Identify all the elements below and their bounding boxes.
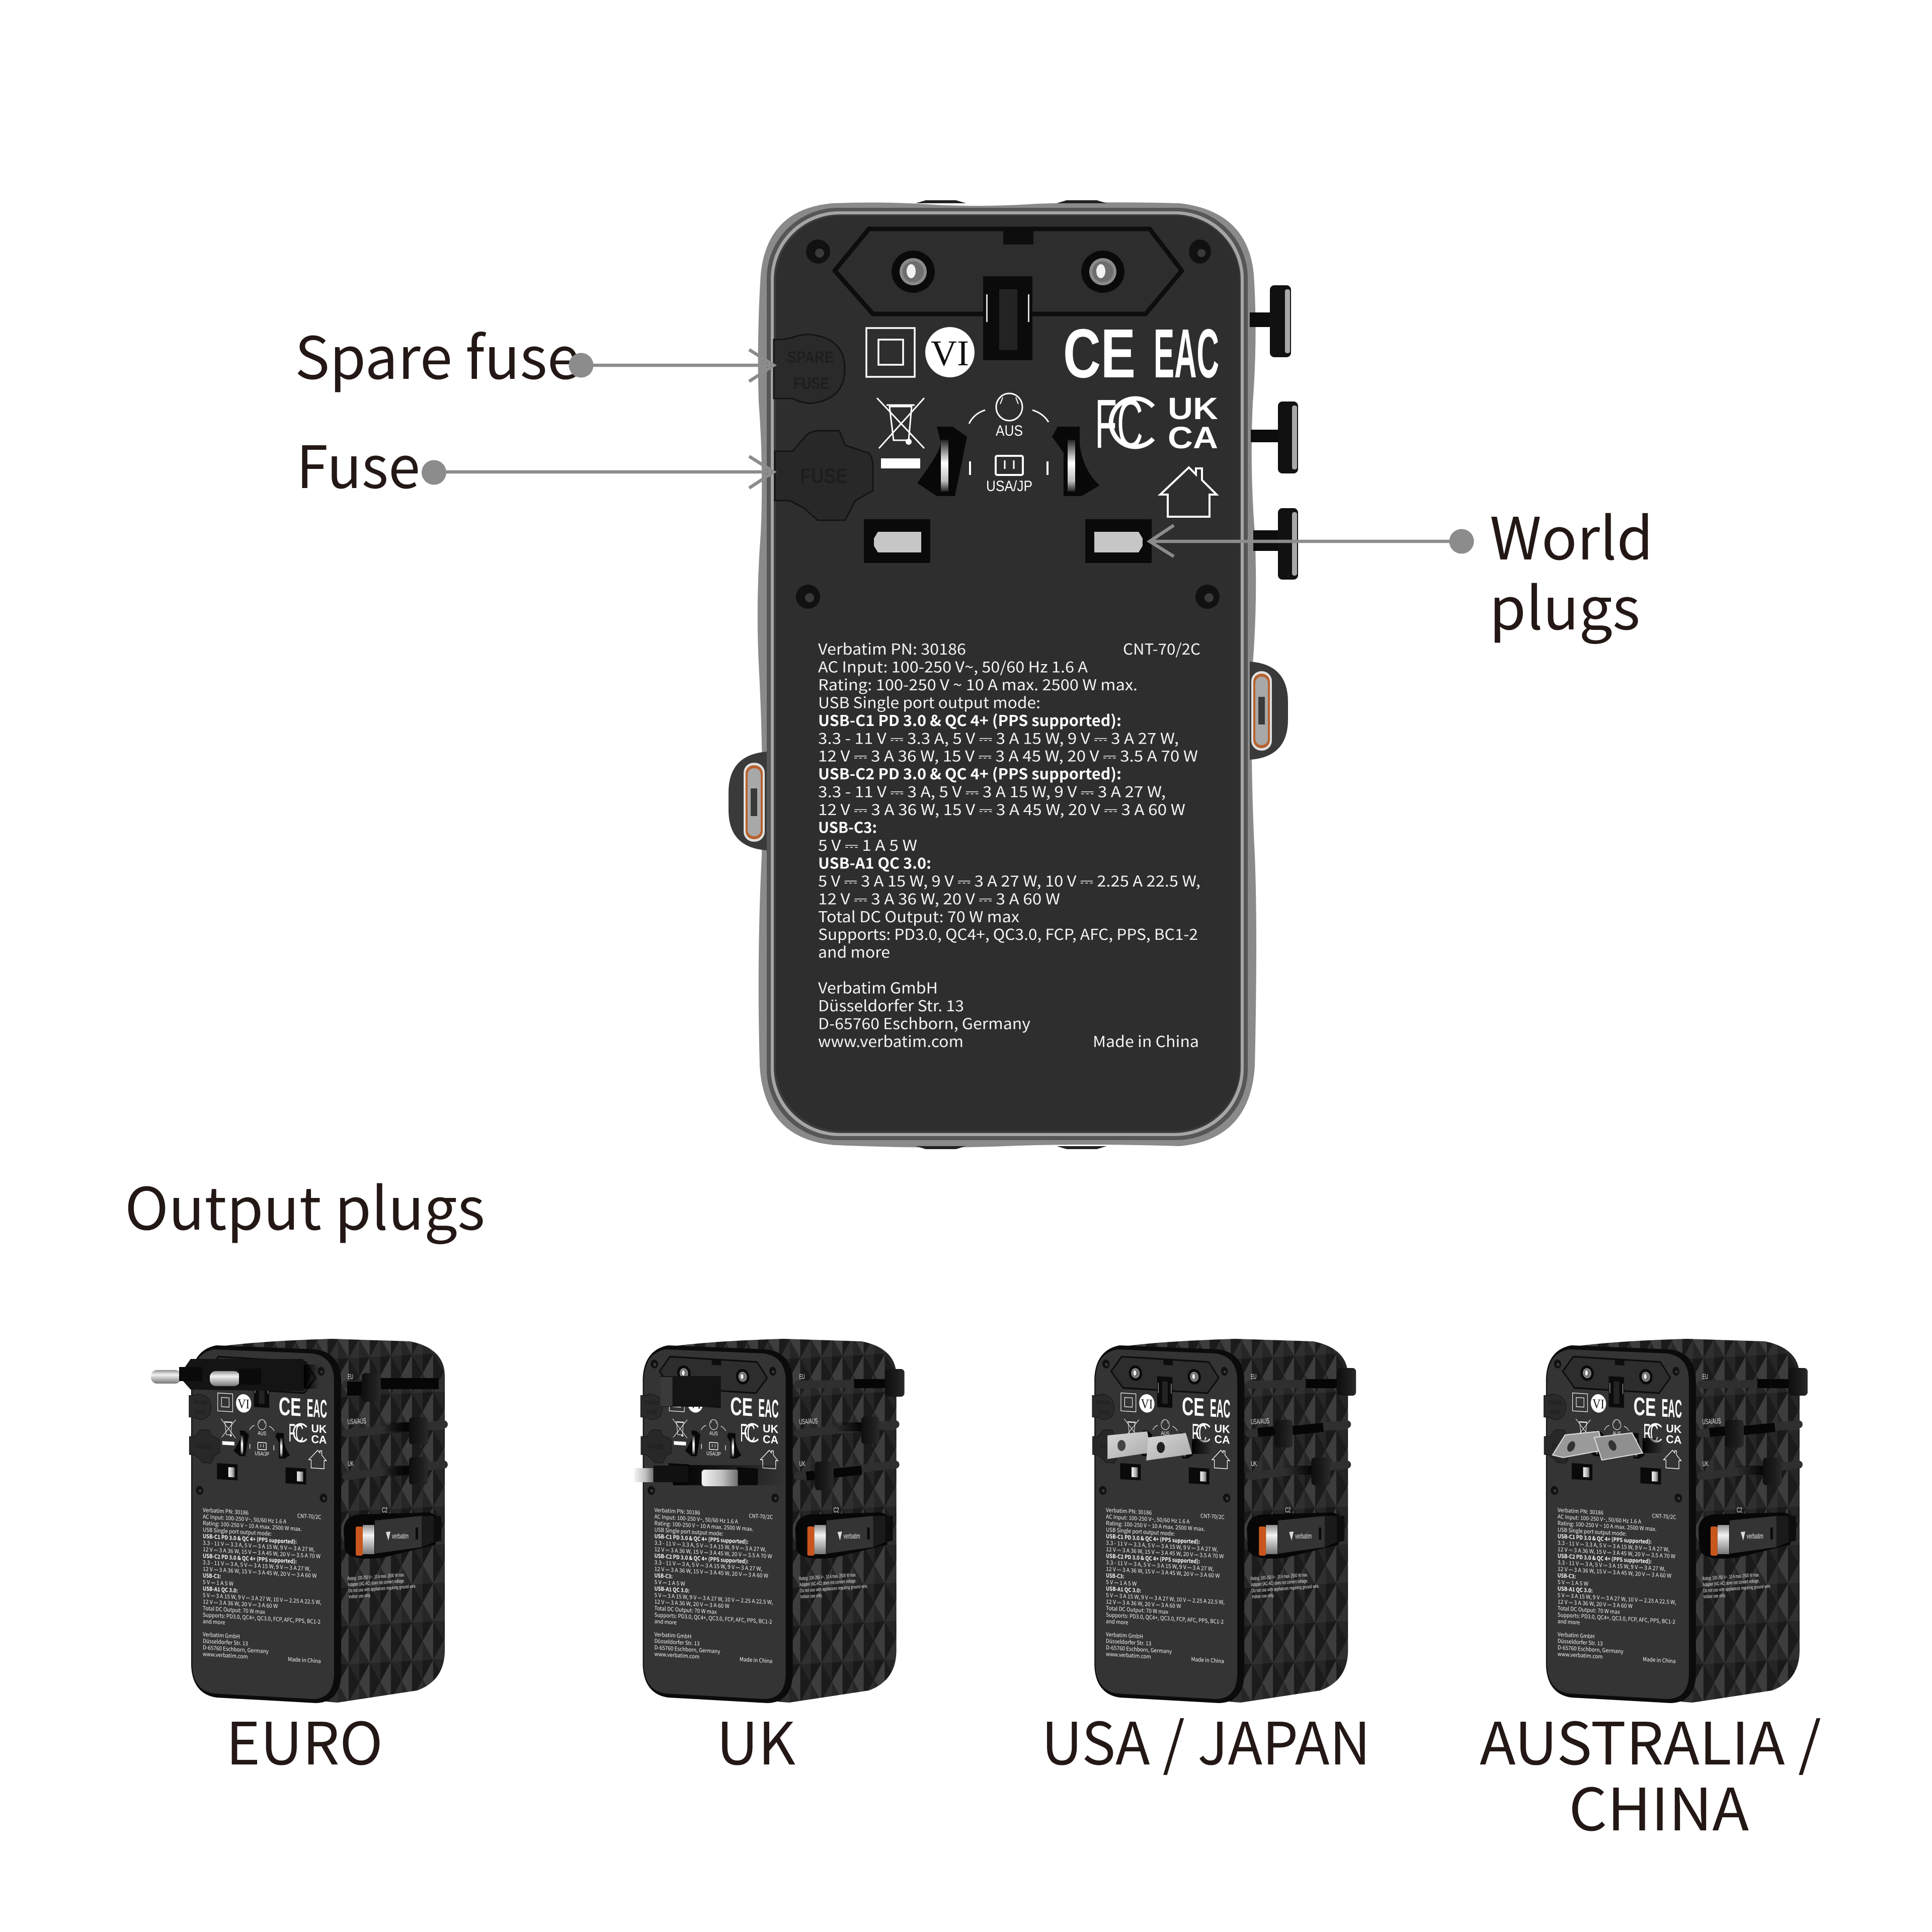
specification text block: Made in China (1093, 1029, 1199, 1052)
panel: adapter with Australia / China plug: EAC (1662, 1394, 1682, 1423)
printed text on adapter: FC (1643, 1418, 1658, 1447)
printed text on adapter: AUS (1613, 1430, 1621, 1437)
USB-C port tab left (729, 752, 767, 850)
printed text on adapter: USB Single port output mode: (1558, 1525, 1627, 1538)
printed text on adapter: CE (1634, 1392, 1656, 1422)
printed text on adapter: 12 V ⎓ 3 A 36 W, 20 V ⎓ 3 A 60 W (1558, 1597, 1633, 1609)
certification marks and small labels: FUSE (793, 374, 829, 392)
printed text on adapter: 5 V ⎓ 3 A 15 W, 9 V ⎓ 3 A 27 W, 10 V ⎓ 2.25 A 22.5 W, (203, 1590, 321, 1606)
printed text on adapter: UK (763, 1422, 778, 1436)
printed text on adapter: CA (763, 1433, 778, 1446)
printed text on adapter: FUSE (1100, 1442, 1115, 1452)
certification marks and small labels: AUS (996, 423, 1023, 439)
printed text on adapter: FC (740, 1418, 755, 1447)
printed text on adapter: Verbatim GmbH (1106, 1630, 1143, 1640)
panel: adapter with EURO plug (151, 1339, 445, 1703)
printed text on adapter: 12 V ⎓ 3 A 36 W, 15 V ⎓ 3 A 45 W, 20 V ⎓ 3 A 60 W (203, 1564, 316, 1579)
specification text block: 12 V ⎓ 3 A 36 W, 20 V ⎓ 3 A 60 W (818, 887, 1060, 909)
panel: adapter with USA / Japan plug: EAC (1210, 1394, 1230, 1423)
specification text block: USB-C1 PD 3.0 & QC 4+ (PPS supported): (818, 708, 1121, 731)
side labels (347, 1373, 417, 1600)
printed text on adapter: CNT-70/2C (749, 1511, 773, 1521)
sliders (807, 1369, 905, 1490)
specification text block: 12 V ⎓ 3 A 36 W, 15 V ⎓ 3 A 45 W, 20 V ⎓ 3 A 60 W (818, 797, 1185, 820)
printed text on adapter: 5 V ⎓ 1 A 5 W (1558, 1577, 1588, 1587)
printed text on adapter: 12 V ⎓ 3 A 36 W, 15 V ⎓ 3 A 45 W, 20 V ⎓ 3.5 A 70 W (1558, 1545, 1675, 1560)
sliders (1710, 1368, 1808, 1485)
printed text on adapter: USB-C2 PD 3.0 & QC 4+ (PPS supported): (203, 1551, 297, 1565)
printed text on adapter: CA (311, 1433, 327, 1446)
printed text on adapter: Total DC Output: 70 W max (1558, 1603, 1620, 1616)
side labels: UK (348, 1460, 354, 1468)
printed text on adapter: USB-C3: (1558, 1571, 1576, 1580)
printed text on adapter: USB-A1 QC 3.0: (1558, 1584, 1593, 1594)
specification text block: 3.3 - 11 V ⎓ 3 A, 5 V ⎓ 3 A 15 W, 9 V ⎓ 3 A 27 W, (818, 780, 1166, 802)
printed text on adapter: 12 V ⎓ 3 A 36 W, 15 V ⎓ 3 A 45 W, 20 V ⎓ 3 A 60 W (655, 1564, 768, 1579)
printed text on adapter: FUSE (647, 1409, 658, 1416)
side labels: Rating: 100-250 V~, 10 A max. 2500 W max. (1251, 1572, 1308, 1582)
heading: Output plugs: Output plugs (125, 1162, 485, 1247)
specification text block: www.verbatim.com (818, 1029, 963, 1052)
side labels: Do not use with appliances requiring ground wire. (800, 1584, 868, 1594)
printed text on adapter: CNT-70/2C (1652, 1511, 1676, 1521)
printed text on adapter: Made in China (1643, 1655, 1675, 1665)
printed text on adapter: UK (311, 1422, 327, 1436)
specification text block: USB-C3: (818, 815, 877, 837)
arrow: world plugs (1150, 525, 1474, 556)
world plug slider 1 (1250, 285, 1291, 357)
printed text on adapter: Verbatim GmbH (203, 1630, 240, 1640)
printed text on adapter: 3.3 - 11 V ⎓ 3 A, 5 V ⎓ 3 A 15 W, 9 V ⎓ 3 A 27 W, (655, 1558, 762, 1572)
printed text on adapter (1096, 1387, 1230, 1665)
label: AUSTRALIA / CHINA: AUSTRALIA / (1480, 1697, 1821, 1782)
printed text on adapter: 12 V ⎓ 3 A 36 W, 15 V ⎓ 3 A 45 W, 20 V ⎓ 3 A 60 W (1558, 1564, 1671, 1579)
specification text block: Supports: PD3.0, QC4+, QC3.0, FCP, AFC, PPS, BC1-2 (818, 922, 1198, 944)
printed text on adapter: CNT-70/2C (1200, 1511, 1225, 1521)
side labels: Adapter (AC-AC) does not convert voltage. (799, 1578, 856, 1588)
printed text on adapter: Supports: PD3.0, QC4+, QC3.0, FCP, AFC, PPS, BC1-2 (203, 1610, 320, 1626)
face icons: recess, slots, safety marks (774, 229, 1220, 609)
specification text block: Düsseldorfer Str. 13 (818, 994, 964, 1016)
printed text on adapter: 3.3 - 11 V ⎓ 3 A, 5 V ⎓ 3 A 15 W, 9 V ⎓ 3 A 27 W, (1106, 1558, 1214, 1572)
printed text on adapter: www.verbatim.com (1106, 1649, 1151, 1660)
panel: main adapter rear view: EAC (1154, 315, 1219, 392)
printed text on adapter: USB-C2 PD 3.0 & QC 4+ (PPS supported): (655, 1551, 749, 1565)
printed text on adapter: AC Input: 100-250 V~, 50/60 Hz 1.6 A (203, 1512, 287, 1525)
side labels: verbatim (1295, 1532, 1312, 1541)
printed text on adapter: 5 V ⎓ 3 A 15 W, 9 V ⎓ 3 A 27 W, 10 V ⎓ 2.25 A 22.5 W, (1106, 1590, 1225, 1606)
side labels: C2 (1285, 1506, 1291, 1514)
printed text on adapter: FUSE (649, 1442, 664, 1452)
label: AUSTRALIA / CHINA (1480, 1697, 1821, 1847)
printed text on adapter: USB-C1 PD 3.0 & QC 4+ (PPS supported): (203, 1532, 297, 1546)
printed text on adapter: AUS (1161, 1430, 1170, 1437)
printed text on adapter: UK (1666, 1422, 1681, 1436)
printed text on adapter: USB-A1 QC 3.0: (655, 1584, 689, 1594)
specification text block: USB-C2 PD 3.0 & QC 4+ (PPS supported): (818, 762, 1121, 784)
printed text on adapter: CA (1215, 1433, 1230, 1446)
printed text on adapter: CE (1182, 1392, 1204, 1422)
heading: Fuse label: Fuse (296, 421, 420, 505)
printed text on adapter: Rating: 100-250 V ~ 10 A max. 2500 W max. (655, 1518, 754, 1533)
label: AUSTRALIA / CHINA: CHINA (1569, 1763, 1749, 1847)
world plug slider 3 (1253, 508, 1298, 580)
printed text on adapter: Verbatim GmbH (655, 1630, 691, 1640)
side labels: Rating: 100-250 V~, 10 A max. 2500 W max. (1702, 1572, 1760, 1582)
printed text on adapter: Düsseldorfer Str. 13 (1106, 1636, 1151, 1647)
printed text on adapter: Verbatim PN: 30186 (1106, 1505, 1152, 1516)
printed text on adapter: Rating: 100-250 V ~ 10 A max. 2500 W max. (203, 1518, 302, 1533)
side labels: EU (1251, 1373, 1256, 1381)
printed text on adapter: Made in China (1191, 1655, 1224, 1665)
side labels: Adapter (AC-AC) does not convert voltage. (1251, 1578, 1308, 1588)
printed text on adapter: USB-C3: (203, 1571, 221, 1580)
printed text on adapter: Made in China (740, 1655, 772, 1665)
printed text on adapter: VI (689, 1397, 701, 1412)
side labels: EU (1703, 1373, 1708, 1381)
side labels: C2 (1737, 1506, 1742, 1514)
printed text on adapter: FUSE (1552, 1442, 1567, 1452)
side labels: verbatim (392, 1532, 409, 1541)
side labels: USA/AUS (799, 1417, 818, 1426)
panel: main adapter rear view (729, 200, 1298, 1149)
arrow: fuse (422, 456, 774, 488)
certification marks and small labels: VI (931, 333, 969, 373)
panel: adapter with USA / Japan plug (1092, 1339, 1356, 1703)
printed text on adapter: USB Single port output mode: (1106, 1525, 1175, 1538)
side labels: Rating: 100-250 V~, 10 A max. 2500 W max. (347, 1572, 405, 1582)
printed text on adapter: Total DC Output: 70 W max (1106, 1603, 1168, 1616)
printed text on adapter: USB-A1 QC 3.0: (1106, 1584, 1141, 1594)
printed text on adapter: 12 V ⎓ 3 A 36 W, 20 V ⎓ 3 A 60 W (655, 1597, 730, 1609)
specification text block: 5 V ⎓ 3 A 15 W, 9 V ⎓ 3 A 27 W, 10 V ⎓ 2.25 A 22.5 W, (818, 869, 1200, 891)
side labels: C2 (382, 1506, 387, 1514)
printed text on adapter: 12 V ⎓ 3 A 36 W, 15 V ⎓ 3 A 45 W, 20 V ⎓ 3 A 60 W (1106, 1564, 1220, 1579)
side labels: Do not use with appliances requiring ground wire. (348, 1584, 417, 1594)
printed text on adapter: 5 V ⎓ 1 A 5 W (203, 1577, 233, 1587)
printed text on adapter: USB-C2 PD 3.0 & QC 4+ (PPS supported): (1558, 1551, 1652, 1565)
panel: adapter with UK plug: EAC (758, 1394, 779, 1423)
side labels: Rating: 100-250 V~, 10 A max. 2500 W max. (799, 1572, 857, 1582)
heading: World plugs label: World (1490, 492, 1653, 577)
certification marks and small labels: FUSE (800, 464, 848, 488)
printed text on adapter: Total DC Output: 70 W max (655, 1603, 717, 1616)
printed text on adapter: AUS (258, 1430, 266, 1437)
USA / Japan flat blades (1107, 1431, 1212, 1461)
printed text on adapter: AC Input: 100-250 V~, 50/60 Hz 1.6 A (655, 1512, 739, 1525)
specification text block: USB-A1 QC 3.0: (818, 851, 931, 873)
printed text on adapter: Supports: PD3.0, QC4+, QC3.0, FCP, AFC, PPS, BC1-2 (1106, 1610, 1224, 1626)
specification text block: Total DC Output: 70 W max (818, 905, 1019, 927)
side labels: verbatim (1747, 1532, 1763, 1541)
printed text on adapter: USB-C1 PD 3.0 & QC 4+ (PPS supported): (1558, 1532, 1652, 1546)
label: EURO: EURO (226, 1697, 383, 1782)
printed text on adapter: SPARE (1096, 1399, 1111, 1407)
printed text on adapter: D-65760 Eschborn, Germany (655, 1643, 720, 1655)
side labels: EU (348, 1373, 353, 1381)
specification text block: CNT-70/2C (1123, 637, 1200, 659)
printed text on adapter: 12 V ⎓ 3 A 36 W, 15 V ⎓ 3 A 45 W, 20 V ⎓ 3.5 A 70 W (655, 1545, 772, 1560)
plug contact right (1094, 532, 1143, 552)
printed text on adapter: USA/JP (255, 1451, 269, 1458)
plug contact left (874, 532, 921, 552)
specification text block: and more (818, 940, 890, 962)
USB-C port tab right (1250, 662, 1288, 760)
printed text on adapter: USB-C2 PD 3.0 & QC 4+ (PPS supported): (1106, 1551, 1200, 1565)
side labels: verbatim (844, 1532, 860, 1541)
printed text on adapter: 12 V ⎓ 3 A 36 W, 15 V ⎓ 3 A 45 W, 20 V ⎓ 3.5 A 70 W (1106, 1545, 1224, 1560)
side labels: USA/AUS (347, 1417, 366, 1426)
UK plug prongs (634, 1376, 786, 1486)
printed text on adapter (1548, 1387, 1682, 1665)
world plug slider 2 (1251, 401, 1298, 473)
printed text on adapter: Düsseldorfer Str. 13 (1558, 1636, 1603, 1647)
heading: World plugs label (1489, 492, 1653, 647)
side labels: Adapter (AC-AC) does not convert voltage. (1703, 1578, 1760, 1588)
printed text on adapter: VI (1592, 1397, 1604, 1412)
side labels: Indoor use only. (349, 1593, 371, 1600)
side labels: Do not use with appliances requiring ground wire. (1251, 1584, 1320, 1594)
printed text on adapter: 3.3 - 11 V ⎓ 3.3 A, 5 V ⎓ 3 A 15 W, 9 V ⎓ 3 A 27 W, (655, 1538, 766, 1553)
printed text on adapter: FUSE (1550, 1409, 1561, 1416)
printed text on adapter: FUSE (1098, 1409, 1109, 1416)
printed text on adapter: UK (1215, 1422, 1230, 1436)
printed text on adapter: USB Single port output mode: (203, 1525, 272, 1538)
printed text on adapter: Verbatim PN: 30186 (655, 1505, 700, 1516)
printed text on adapter: 3.3 - 11 V ⎓ 3 A, 5 V ⎓ 3 A 15 W, 9 V ⎓ 3 A 27 W, (203, 1558, 310, 1572)
printed text on adapter: USB-C1 PD 3.0 & QC 4+ (PPS supported): (1106, 1532, 1200, 1546)
printed text on adapter: USA/JP (1609, 1451, 1624, 1458)
printed text on adapter: www.verbatim.com (1558, 1649, 1602, 1660)
side labels: Adapter (AC-AC) does not convert voltage. (348, 1578, 405, 1588)
side labels: Indoor use only. (1704, 1593, 1726, 1600)
printed text on adapter: CNT-70/2C (297, 1511, 321, 1521)
printed text on adapter: USB Single port output mode: (655, 1525, 723, 1538)
specification text block: D-65760 Eschborn, Germany (818, 1011, 1030, 1033)
sliders (1258, 1368, 1356, 1485)
certification marks and small labels: USA/JP (986, 478, 1032, 495)
printed text on adapter: USA/JP (706, 1451, 721, 1458)
side labels (1702, 1373, 1772, 1600)
printed text on adapter: AUS (709, 1430, 718, 1437)
printed text on adapter: FC (1192, 1418, 1206, 1447)
printed text on adapter: 5 V ⎓ 1 A 5 W (655, 1577, 685, 1587)
printed text on adapter: 3.3 - 11 V ⎓ 3.3 A, 5 V ⎓ 3 A 15 W, 9 V ⎓ 3 A 27 W, (203, 1538, 314, 1553)
specification text block: USB Single port output mode: (818, 690, 1040, 712)
printed text on adapter: www.verbatim.com (203, 1649, 248, 1660)
printed text on adapter: Düsseldorfer Str. 13 (203, 1636, 248, 1647)
printed text on adapter: Düsseldorfer Str. 13 (655, 1636, 700, 1647)
printed text on adapter: and more (1106, 1617, 1129, 1626)
certification marks and small labels: UK (1168, 391, 1218, 426)
printed text on adapter: Supports: PD3.0, QC4+, QC3.0, FCP, AFC, PPS, BC1-2 (655, 1610, 772, 1626)
printed text on adapter (193, 1387, 327, 1665)
side labels: USA/AUS (1702, 1417, 1721, 1426)
specification text block (818, 637, 1200, 1052)
printed text on adapter: SPARE (645, 1399, 659, 1407)
printed text on adapter: 5 V ⎓ 3 A 15 W, 9 V ⎓ 3 A 27 W, 10 V ⎓ 2.25 A 22.5 W, (1558, 1590, 1676, 1606)
printed text on adapter: 12 V ⎓ 3 A 36 W, 15 V ⎓ 3 A 45 W, 20 V ⎓ 3.5 A 70 W (203, 1545, 320, 1560)
side labels: Do not use with appliances requiring ground wire. (1703, 1584, 1771, 1594)
certification marks and small labels: CE (1063, 315, 1136, 392)
printed text on adapter: CE (731, 1392, 753, 1422)
side labels: UK (1251, 1460, 1257, 1468)
panel: adapter with EURO plug: EAC (307, 1394, 327, 1423)
Australia / China angled blades (1553, 1431, 1664, 1460)
printed text on adapter: Verbatim PN: 30186 (203, 1505, 249, 1516)
printed text on adapter: 5 V ⎓ 1 A 5 W (1106, 1577, 1137, 1587)
printed text on adapter: D-65760 Eschborn, Germany (1558, 1643, 1624, 1655)
printed text on adapter: and more (1558, 1617, 1580, 1626)
printed text on adapter: 5 V ⎓ 3 A 15 W, 9 V ⎓ 3 A 27 W, 10 V ⎓ 2.25 A 22.5 W, (655, 1590, 773, 1606)
printed text on adapter: and more (655, 1617, 677, 1626)
certification marks and small labels: CA (1168, 421, 1218, 455)
certification marks and small labels: SPARE (787, 348, 834, 366)
side labels (1251, 1373, 1320, 1600)
printed text on adapter: CE (279, 1392, 301, 1422)
printed text on adapter: 3.3 - 11 V ⎓ 3.3 A, 5 V ⎓ 3 A 15 W, 9 V ⎓ 3 A 27 W, (1558, 1538, 1669, 1553)
adapter metal frame (758, 200, 1256, 1149)
printed text on adapter: SPARE (1548, 1399, 1562, 1407)
specification text block: Rating: 100-250 V ~ 10 A max. 2500 W max. (818, 673, 1138, 695)
side labels: C2 (834, 1506, 839, 1514)
specification text block: 3.3 - 11 V ⎓ 3.3 A, 5 V ⎓ 3 A 15 W, 9 V ⎓ 3 A 27 W, (818, 726, 1179, 748)
printed text on adapter: AC Input: 100-250 V~, 50/60 Hz 1.6 A (1558, 1512, 1642, 1525)
side labels: UK (1703, 1460, 1709, 1468)
Euro plug pins (151, 1359, 319, 1391)
printed text on adapter: 3.3 - 11 V ⎓ 3 A, 5 V ⎓ 3 A 15 W, 9 V ⎓ 3 A 27 W, (1558, 1558, 1665, 1572)
side labels: Indoor use only. (1252, 1593, 1274, 1600)
printed text on adapter: 12 V ⎓ 3 A 36 W, 20 V ⎓ 3 A 60 W (203, 1597, 278, 1609)
printed text on adapter: FC (289, 1418, 303, 1447)
printed text on adapter: USB-A1 QC 3.0: (203, 1584, 238, 1594)
printed text on adapter: VI (237, 1397, 250, 1412)
sliders (347, 1373, 439, 1485)
printed text on adapter: USB-C3: (655, 1571, 673, 1580)
label: UK: UK (716, 1697, 795, 1782)
printed text on adapter: FUSE (195, 1409, 206, 1416)
printed text on adapter: SPARE (193, 1399, 208, 1407)
printed text on adapter: Supports: PD3.0, QC4+, QC3.0, FCP, AFC, PPS, BC1-2 (1558, 1610, 1675, 1626)
printed text on adapter: Total DC Output: 70 W max (203, 1603, 265, 1616)
printed text on adapter: USB-C3: (1106, 1571, 1124, 1580)
heading: World plugs label: plugs (1489, 562, 1640, 647)
certification marks and small labels: FC (1095, 385, 1143, 463)
panel: adapter with Australia / China plug (1544, 1339, 1808, 1703)
printed text on adapter: FUSE (197, 1442, 212, 1452)
side labels: UK (799, 1460, 806, 1468)
arrow: spare fuse (569, 350, 774, 381)
printed text on adapter: D-65760 Eschborn, Germany (1106, 1643, 1172, 1655)
printed text on adapter: 12 V ⎓ 3 A 36 W, 20 V ⎓ 3 A 60 W (1106, 1597, 1181, 1609)
printed text on adapter: Verbatim PN: 30186 (1558, 1505, 1603, 1516)
printed text on adapter: USB-C1 PD 3.0 & QC 4+ (PPS supported): (655, 1532, 749, 1546)
specification text block: 12 V ⎓ 3 A 36 W, 15 V ⎓ 3 A 45 W, 20 V ⎓ 3.5 A 70 W (818, 744, 1198, 766)
printed text on adapter: Rating: 100-250 V ~ 10 A max. 2500 W max. (1106, 1518, 1205, 1533)
certification marks and small labels (787, 315, 1219, 495)
printed text on adapter: D-65760 Eschborn, Germany (203, 1643, 269, 1655)
printed text on adapter: CA (1666, 1433, 1681, 1446)
printed text on adapter: VI (1141, 1397, 1153, 1412)
printed text on adapter: and more (203, 1617, 225, 1626)
printed text on adapter: USA/JP (1158, 1451, 1172, 1458)
specification text block: Verbatim GmbH (818, 976, 938, 998)
specification text block: 5 V ⎓ 1 A 5 W (818, 833, 917, 855)
panel: adapter with UK plug (634, 1339, 905, 1703)
side labels: Indoor use only. (800, 1593, 823, 1600)
printed text on adapter: 3.3 - 11 V ⎓ 3.3 A, 5 V ⎓ 3 A 15 W, 9 V ⎓ 3 A 27 W, (1106, 1538, 1218, 1553)
side labels (799, 1373, 868, 1600)
printed text on adapter (645, 1387, 779, 1665)
specification text block: AC Input: 100-250 V~, 50/60 Hz 1.6 A (818, 655, 1088, 677)
specification text block: Verbatim PN: 30186 (818, 637, 966, 659)
printed text on adapter: www.verbatim.com (655, 1649, 699, 1660)
printed text on adapter: Verbatim GmbH (1558, 1630, 1595, 1640)
side labels: EU (799, 1373, 805, 1381)
printed text on adapter: AC Input: 100-250 V~, 50/60 Hz 1.6 A (1106, 1512, 1190, 1525)
label: USA / JAPAN: USA / JAPAN (1041, 1697, 1371, 1782)
printed text on adapter: Rating: 100-250 V ~ 10 A max. 2500 W max. (1558, 1518, 1657, 1533)
side labels: USA/AUS (1251, 1417, 1269, 1426)
heading: Spare fuse label: Spare fuse (295, 311, 580, 396)
printed text on adapter: Made in China (288, 1655, 321, 1665)
